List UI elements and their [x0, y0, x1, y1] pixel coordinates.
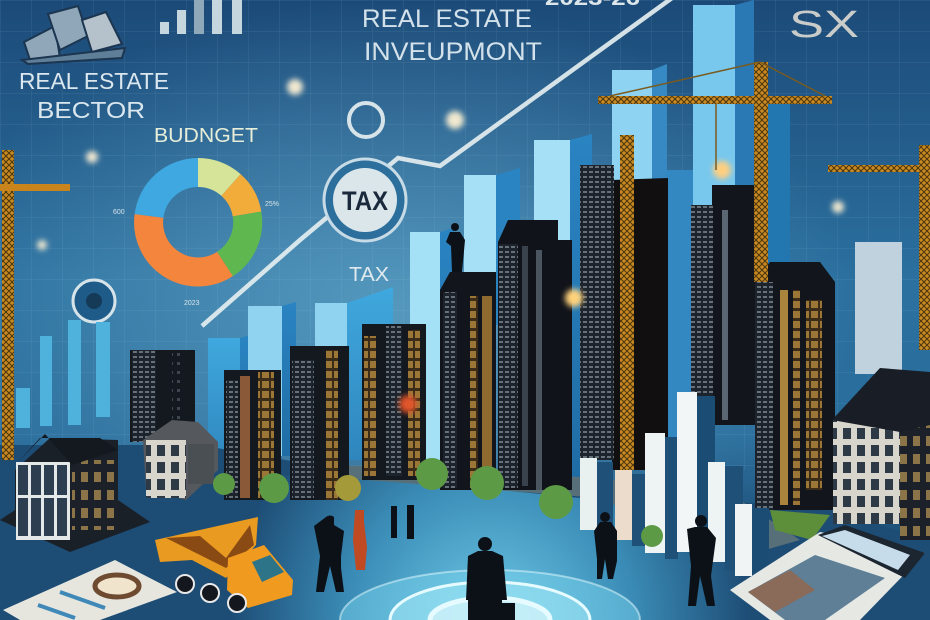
label: tax: TAX [349, 264, 389, 286]
light flares [399, 161, 731, 413]
icon: tax badge [324, 159, 406, 241]
icon: phone circle [73, 280, 115, 322]
donut labels: 600 [113, 209, 125, 216]
truck wheels [176, 575, 246, 612]
light-blue 3D bars [16, 0, 790, 490]
heading: real estate investment [362, 5, 542, 66]
person: left [314, 515, 344, 592]
bar 5 [464, 168, 520, 325]
segment: green [225, 214, 248, 264]
bar 4 [410, 228, 454, 482]
building 1 [130, 350, 195, 442]
cranes [0, 62, 930, 470]
city floor [0, 445, 930, 620]
building 4 [362, 324, 426, 480]
crane: centre [598, 62, 832, 282]
bar 6 [534, 134, 592, 490]
white bar d [677, 392, 715, 556]
icon: tax badge: TAX [342, 186, 388, 216]
document [3, 560, 177, 620]
heading: budget: BUDNGET [154, 125, 258, 147]
white bar b [615, 470, 646, 546]
person: small pair [391, 505, 414, 539]
white bar f [735, 504, 769, 578]
small bar chart top [160, 0, 242, 34]
bar 8 [693, 0, 790, 275]
truck [155, 517, 293, 612]
person: right of centre [594, 512, 617, 579]
donut labels: 25% [265, 201, 279, 208]
segment: pale yellow [198, 172, 231, 185]
crane: middle mast [620, 135, 634, 470]
truck cab [227, 545, 293, 608]
building 2 [224, 370, 281, 500]
building 7 [580, 165, 668, 470]
segment: amber [231, 185, 247, 214]
donut chart [149, 172, 248, 272]
bar 3 [315, 287, 393, 460]
tall dark buildings [130, 165, 902, 510]
building 6 [498, 220, 572, 490]
growth arrow line [202, 0, 672, 326]
person: far right [687, 515, 716, 606]
people [314, 505, 716, 620]
white bar c [645, 433, 678, 559]
building 5 [440, 272, 496, 490]
white bar a [580, 458, 613, 534]
white 3D bars foreground [580, 392, 769, 578]
segment: blue [149, 172, 198, 216]
bar 2 [248, 302, 296, 456]
heading: SX: SX [789, 4, 859, 46]
heading: real estate sector [19, 68, 169, 123]
truck body [155, 517, 258, 578]
building 3 [290, 346, 349, 500]
trees [213, 458, 663, 547]
white tower [855, 242, 902, 374]
person: centre foreground [466, 537, 507, 620]
bar 1 [208, 335, 250, 468]
blue column behind centre [666, 170, 694, 450]
icon: building sketch [22, 6, 125, 64]
heading: real estate investment: REAL ESTATE [362, 5, 532, 33]
icon: small coin [349, 103, 383, 137]
water rings [340, 570, 640, 620]
house: right [832, 368, 930, 540]
house: left [0, 434, 150, 552]
bar group: far left [16, 320, 110, 428]
building 9 [755, 262, 835, 510]
person: orange vest [353, 510, 367, 570]
calculator [730, 525, 925, 620]
heading: real estate investment: INVEUPMONT [364, 38, 542, 66]
building 8 [691, 185, 756, 425]
crane: right [828, 145, 930, 350]
crane: left [0, 150, 70, 460]
person on building [446, 223, 465, 272]
green patch [770, 510, 830, 540]
heading: real estate sector: BECTOR [37, 97, 145, 123]
donut labels [113, 201, 279, 307]
white bar e [708, 462, 743, 570]
briefcase [498, 603, 515, 620]
bar 7 [612, 64, 667, 260]
heading: real estate sector: REAL ESTATE [19, 68, 169, 94]
floating orbs [37, 79, 844, 250]
segment: orange [149, 216, 225, 272]
donut labels: 2023 [184, 300, 200, 307]
house: centre [143, 420, 218, 500]
